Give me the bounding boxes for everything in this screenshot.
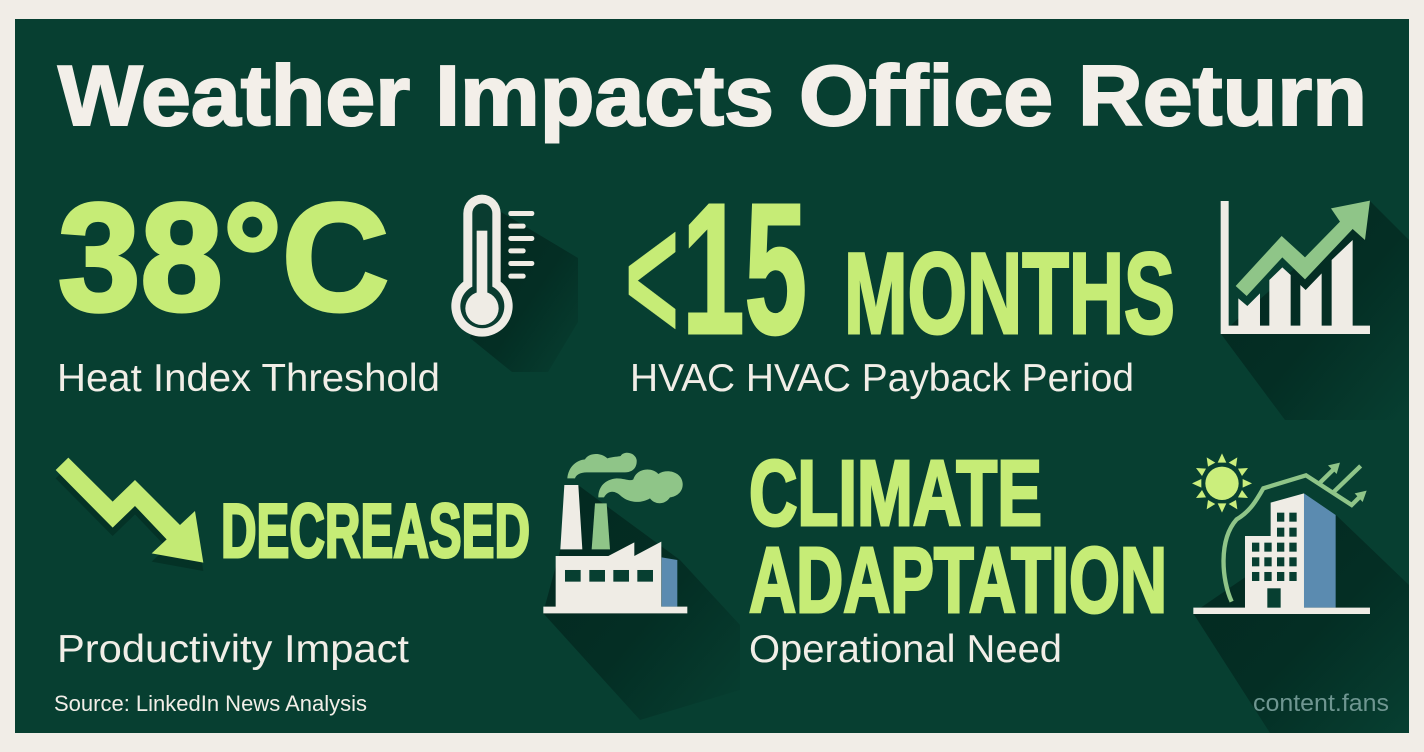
stat: <15 MONTHS: 15: [682, 166, 807, 373]
stat: DECREASED: DECREASED: [221, 489, 530, 574]
icon: factory: [543, 453, 687, 613]
title: Weather Impacts Office Return: [58, 49, 1367, 144]
stat: <15 MONTHS: <: [625, 178, 679, 379]
watermark: content.fans: [1253, 690, 1389, 717]
stat: 38°C: 38°C: [58, 172, 389, 343]
icon: thermometer: [451, 195, 534, 337]
label: Heat Index Threshold: Heat Index Threshold: [57, 357, 440, 400]
source note: Source: LinkedIn News Analysis: [54, 691, 367, 716]
icon: building with sun: [1192, 453, 1370, 614]
stat: CLIMATE ADAPTATION: CLIMATE: [749, 441, 1042, 545]
stat: <15 MONTHS: [625, 166, 1175, 379]
stat: CLIMATE ADAPTATION: [749, 441, 1167, 632]
stat: <15 MONTHS: MONTHS: [844, 230, 1175, 358]
stat: CLIMATE ADAPTATION: ADAPTATION: [749, 528, 1167, 632]
label: HVAC HVAC Payback Period: HVAC HVAC Payback Period: [630, 357, 1134, 400]
long shadows: [470, 201, 1409, 733]
icon: bar chart with rising arrow: [1221, 201, 1370, 334]
icon: down arrow: [56, 458, 203, 571]
label: Productivity Impact: Productivity Impact: [57, 628, 409, 671]
label: Operational Need: Operational Need: [749, 628, 1062, 671]
